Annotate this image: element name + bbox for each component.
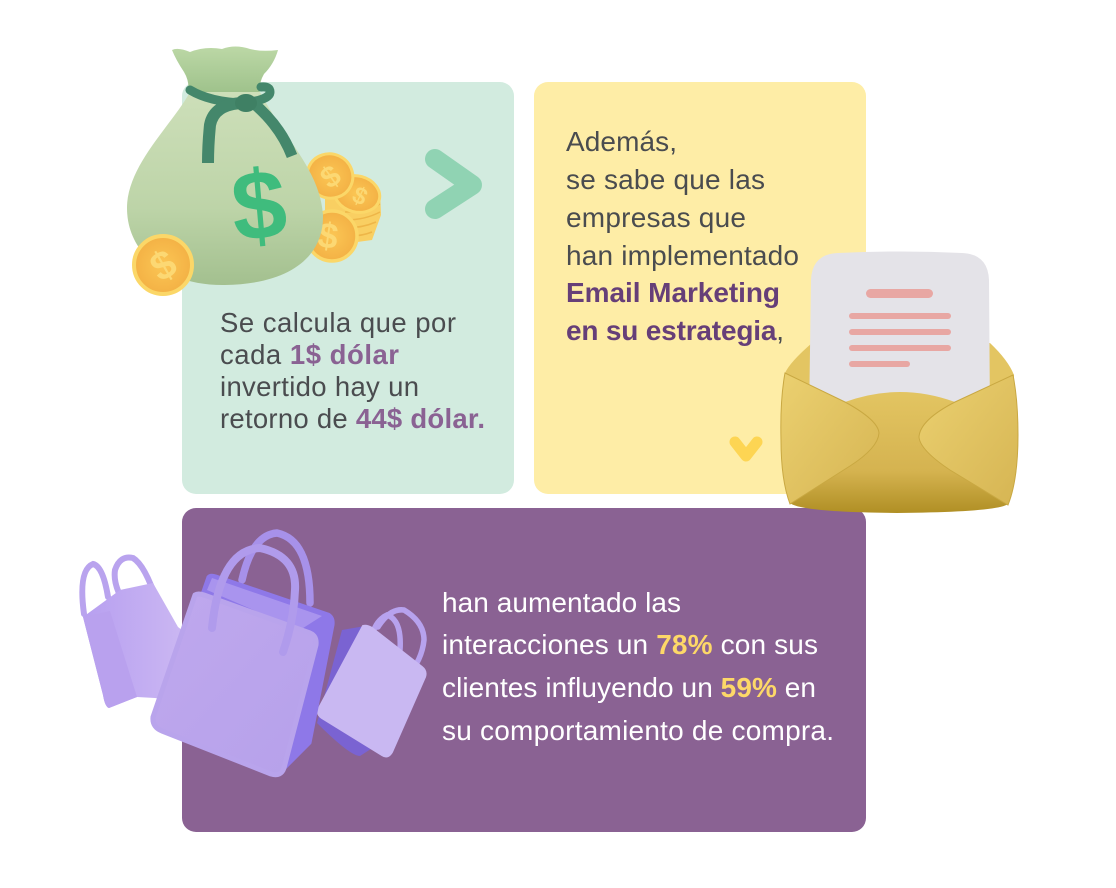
text: interactions and purchase behaviour: interacciones un 78% con sus	[442, 629, 818, 660]
icon: money bag with coins	[127, 46, 384, 294]
icon: letter lines	[849, 289, 951, 367]
icon: front coin: $	[143, 241, 184, 290]
text: email marketing strategy: Además,	[566, 126, 677, 157]
arrow: down chevron	[735, 442, 757, 456]
text: return on investment	[220, 307, 485, 434]
icon: coin stack: $	[348, 181, 372, 212]
text: email marketing strategy: empresas que	[566, 202, 746, 233]
icon: letter	[809, 252, 990, 420]
icon: back flaps	[785, 343, 1014, 420]
icon: bag body	[127, 92, 323, 285]
arrow: right chevron	[435, 159, 472, 209]
icon: left flap	[781, 373, 879, 504]
text: email marketing strategy: han implementado	[566, 240, 799, 271]
icon: front coin	[134, 236, 192, 294]
text: interactions and purchase behaviour	[442, 587, 834, 746]
text: email marketing strategy: Email Marketing	[566, 277, 780, 308]
text: interactions and purchase behaviour: han aumentado las	[442, 587, 681, 618]
text: interactions and purchase behaviour: clientes influyendo un 59% en	[442, 672, 816, 703]
text: return on investment: retorno de 44$ dólar.	[220, 403, 485, 434]
text: email marketing strategy: en su estrategia,	[566, 315, 784, 346]
text: return on investment: cada 1$ dólar	[220, 339, 399, 370]
icon: shopping bags	[82, 533, 426, 775]
panel: green	[182, 82, 514, 494]
icon: envelope with letter	[781, 252, 1018, 513]
icon: dollar sign: $	[227, 148, 291, 262]
icon: right bag	[317, 610, 426, 756]
icon: right flap	[919, 375, 1018, 505]
icon: coin stack	[300, 146, 384, 261]
text: email marketing strategy: se sabe que las	[566, 164, 765, 195]
icon: large bag	[153, 533, 333, 775]
panel: yellow	[534, 82, 866, 494]
text: return on investment: invertido hay un	[220, 371, 419, 402]
text: email marketing strategy	[566, 126, 799, 346]
icon: coin stack: $	[315, 159, 347, 196]
icon: rope	[190, 87, 292, 163]
icon: left bag	[82, 558, 195, 708]
text: return on investment: Se calcula que por	[220, 307, 456, 338]
icon: coin stack: $	[315, 214, 341, 257]
text: interactions and purchase behaviour: su comportamiento de compra.	[442, 715, 834, 746]
icon: bag neck	[172, 46, 278, 97]
icon: envelope body	[781, 373, 1018, 513]
panel: purple	[182, 508, 866, 832]
